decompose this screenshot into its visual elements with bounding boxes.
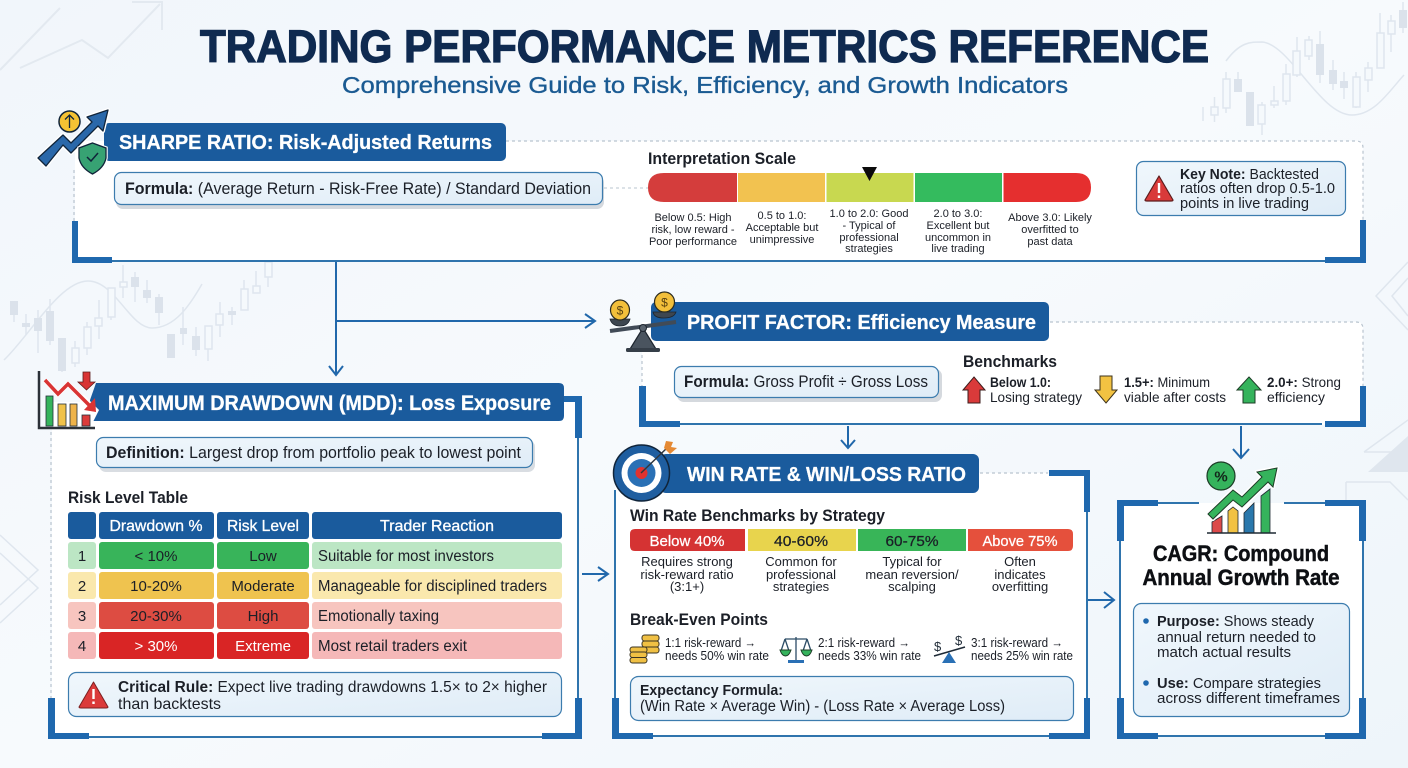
MDD header: MAXIMUM DRAWDOWN (MDD): Loss Exposure bbox=[108, 392, 551, 415]
row 1: low: Low bbox=[249, 548, 277, 565]
benchmark: 1.5+: viable after costs bbox=[1124, 389, 1226, 405]
scale labels: risk, low reward - bbox=[651, 224, 735, 236]
win rate band descriptions: overfitting bbox=[992, 579, 1048, 594]
benchmark: 2.0+ bbox=[1237, 374, 1341, 405]
benchmark: below 1.0: Losing strategy bbox=[990, 389, 1082, 405]
break-even heading: Break-Even Points bbox=[630, 610, 768, 629]
Sharpe formula box bbox=[114, 172, 604, 209]
Profit Factor formula box bbox=[674, 366, 942, 402]
critical rule callout bbox=[68, 672, 562, 716]
row 2: moderate: 2 bbox=[78, 578, 86, 595]
Sharpe header bbox=[104, 123, 506, 161]
win rate bands: Above 75% bbox=[982, 533, 1058, 550]
Profit Factor header: PROFIT FACTOR: Efficiency Measure bbox=[687, 312, 1036, 334]
row 1: low bbox=[68, 542, 562, 569]
expectancy formula box: Expectancy Formula: bbox=[640, 682, 783, 699]
Win Rate header bbox=[660, 454, 979, 493]
scale labels: 1.0 to 2.0: Good bbox=[830, 208, 908, 220]
scale labels: 2.0 to 3.0: bbox=[934, 208, 982, 220]
icon: growth chart with percent: % bbox=[1214, 468, 1228, 486]
scale labels: past data bbox=[1027, 236, 1074, 248]
panel: Sharpe Ratio bbox=[38, 110, 1366, 263]
benchmark: 2.0+: 2.0+: Strong bbox=[1267, 374, 1341, 390]
scale labels bbox=[649, 208, 1092, 255]
benchmark: 1.5+ bbox=[1095, 374, 1226, 405]
Sharpe header: SHARPE RATIO: Risk-Adjusted Returns bbox=[119, 132, 492, 154]
scale labels: strategies bbox=[845, 243, 893, 255]
scale labels: Above 3.0: Likely bbox=[1008, 212, 1092, 224]
critical rule callout: Critical Rule: Expect live trading drawdowns 1.5× to 2× higher bbox=[118, 679, 548, 696]
risk table heading: Risk Level Table bbox=[68, 488, 188, 507]
scale labels: overfitted to bbox=[1021, 224, 1079, 236]
win rate band descriptions: scalping bbox=[888, 579, 936, 594]
benchmark: 1.5+: 1.5+: Minimum bbox=[1124, 374, 1210, 390]
key note callout: ratios often drop 0.5-1.0 bbox=[1180, 181, 1335, 197]
break-even: 1:1: 1:1 risk-reward → bbox=[665, 636, 756, 650]
row 2: moderate: Manageable for disciplined traders bbox=[318, 578, 547, 595]
CAGR title: CAGR: Compound bbox=[1153, 541, 1329, 566]
Profit Factor header bbox=[651, 302, 1049, 341]
definition box: Definition: Largest drop from portfolio peak to lowest point bbox=[106, 444, 521, 462]
table header row: Drawdown % bbox=[110, 518, 202, 535]
icon: balance with coins bbox=[610, 292, 676, 352]
break-even: 3:1: 3:1 risk-reward → bbox=[971, 636, 1063, 650]
win rate band descriptions: risk-reward ratio bbox=[640, 567, 734, 582]
Sharpe formula box: Formula: (Average Return - Risk-Free Rate) / Standard Deviation bbox=[125, 180, 591, 198]
row 3: high: 20-30% bbox=[130, 608, 182, 625]
scale labels: Poor performance bbox=[649, 236, 737, 248]
benchmark: below 1.0 bbox=[963, 374, 1082, 405]
CAGR details box bbox=[1134, 604, 1350, 716]
win rate band descriptions: (3:1+) bbox=[670, 579, 704, 594]
panel: Maximum Drawdown bbox=[38, 371, 582, 739]
definition box bbox=[96, 438, 535, 472]
scale labels: 0.5 to 1.0: bbox=[758, 210, 806, 222]
row 4: extreme: Most retail traders exit bbox=[318, 638, 468, 655]
icon: target with arrow bbox=[614, 441, 677, 501]
win rate bands: Below 40% bbox=[650, 533, 724, 550]
risk level table bbox=[68, 512, 562, 659]
win rate band descriptions: professional bbox=[766, 567, 836, 582]
row 3: high: 3 bbox=[78, 608, 86, 625]
break-even: 3:1 bbox=[934, 633, 1073, 663]
Win Rate header: WIN RATE & WIN/LOSS RATIO bbox=[687, 464, 966, 486]
break-even: 2:1: 2:1 risk-reward → bbox=[818, 636, 910, 650]
icon: falling chart with bars bbox=[38, 371, 100, 428]
key note callout: points in live trading bbox=[1180, 196, 1309, 212]
interpretation scale heading: Interpretation Scale bbox=[648, 149, 796, 168]
benchmarks heading: Benchmarks bbox=[963, 353, 1057, 371]
break-even: 2:1 bbox=[780, 636, 921, 663]
win rate band descriptions: mean reversion/ bbox=[865, 567, 959, 582]
panel: Win Rate bbox=[612, 441, 1090, 739]
win rate band descriptions: Common for bbox=[765, 554, 837, 569]
break-even: 3:1: needs 25% win rate bbox=[971, 649, 1073, 663]
scale labels: professional bbox=[839, 232, 899, 244]
subtitle: Comprehensive Guide to Risk, Efficiency, and Growth Indicators bbox=[342, 72, 1068, 98]
break-even: 2:1: needs 33% win rate bbox=[818, 649, 921, 663]
row 2: moderate: Moderate bbox=[231, 578, 295, 595]
scale labels: - Typical of bbox=[842, 220, 896, 232]
row 1: low: 1 bbox=[78, 548, 86, 565]
icon: balance with coins: $ bbox=[661, 296, 668, 310]
connector arrows between panels bbox=[329, 178, 1249, 608]
row 4: extreme bbox=[68, 632, 562, 659]
win rate band descriptions bbox=[640, 554, 1048, 594]
scale labels: Acceptable but bbox=[746, 222, 818, 234]
icon: rising arrow with shield and coin bbox=[38, 110, 108, 174]
expectancy formula box: (Win Rate × Average Win) - (Loss Rate × Average Loss) bbox=[640, 698, 1005, 715]
break-even: 3:1: $ bbox=[955, 633, 963, 648]
CAGR details box: match actual results bbox=[1157, 644, 1291, 661]
row 3: high bbox=[68, 602, 562, 629]
win rate band descriptions: indicates bbox=[994, 567, 1046, 582]
title: TRADING PERFORMANCE METRICS REFERENCE bbox=[200, 21, 1209, 72]
scale labels: Excellent but bbox=[927, 220, 989, 232]
panel: CAGR bbox=[1117, 462, 1366, 739]
win rate bands: 60-75% bbox=[886, 533, 938, 550]
icon: growth chart with percent bbox=[1207, 462, 1277, 533]
break-even: 1:1: needs 50% win rate bbox=[665, 649, 769, 663]
benchmark: 2.0+: efficiency bbox=[1267, 389, 1325, 405]
row 4: extreme: > 30% bbox=[135, 638, 177, 655]
CAGR details box: Purpose: Shows steady bbox=[1157, 613, 1314, 630]
row 4: extreme: 4 bbox=[78, 638, 86, 655]
panel: Profit Factor bbox=[610, 292, 1366, 427]
win rate band descriptions: Often bbox=[1004, 554, 1036, 569]
interpretation scale bar bbox=[648, 167, 1091, 202]
row 4: extreme: Extreme bbox=[235, 638, 291, 655]
win rate band descriptions: strategies bbox=[773, 579, 830, 594]
CAGR details box: annual return needed to bbox=[1157, 629, 1316, 646]
CAGR details box: Use: Compare strategies bbox=[1157, 675, 1321, 692]
key note callout bbox=[1136, 162, 1346, 216]
table header row bbox=[68, 512, 562, 539]
break-even: 1:1 bbox=[630, 635, 769, 663]
CAGR title bbox=[1142, 541, 1340, 590]
row 3: high: Emotionally taxing bbox=[318, 608, 439, 625]
scale labels: uncommon in bbox=[925, 232, 991, 244]
CAGR details box: across different timeframes bbox=[1157, 690, 1340, 707]
table header row: Trader Reaction bbox=[380, 518, 494, 535]
win rate band descriptions: Typical for bbox=[882, 554, 942, 569]
row 1: low: < 10% bbox=[135, 548, 177, 565]
critical rule callout: than backtests bbox=[118, 696, 221, 713]
benchmark: below 1.0: Below 1.0: bbox=[990, 374, 1051, 390]
row 3: high: High bbox=[248, 608, 278, 625]
expectancy formula box bbox=[630, 676, 1074, 720]
Profit Factor formula box: Formula: Gross Profit ÷ Gross Loss bbox=[684, 373, 928, 391]
scale labels: live trading bbox=[931, 243, 985, 255]
win rate bands: 40-60% bbox=[774, 533, 828, 550]
row 2: moderate: 10-20% bbox=[130, 578, 182, 595]
scale labels: Below 0.5: High bbox=[654, 212, 732, 224]
key note callout: Key Note: Backtested bbox=[1180, 167, 1319, 183]
win rate bands bbox=[630, 529, 1073, 551]
row 1: low: Suitable for most investors bbox=[318, 548, 494, 565]
icon: balance with coins: $ bbox=[617, 304, 624, 318]
win rate benchmarks heading: Win Rate Benchmarks by Strategy bbox=[630, 506, 885, 525]
scale labels: unimpressive bbox=[750, 234, 814, 246]
win rate band descriptions: Requires strong bbox=[641, 554, 733, 569]
CAGR title: Annual Growth Rate bbox=[1142, 565, 1340, 590]
MDD header bbox=[90, 383, 564, 421]
row 2: moderate bbox=[68, 572, 562, 599]
break-even: 3:1: $ bbox=[934, 639, 942, 654]
table header row: Risk Level bbox=[227, 518, 299, 535]
